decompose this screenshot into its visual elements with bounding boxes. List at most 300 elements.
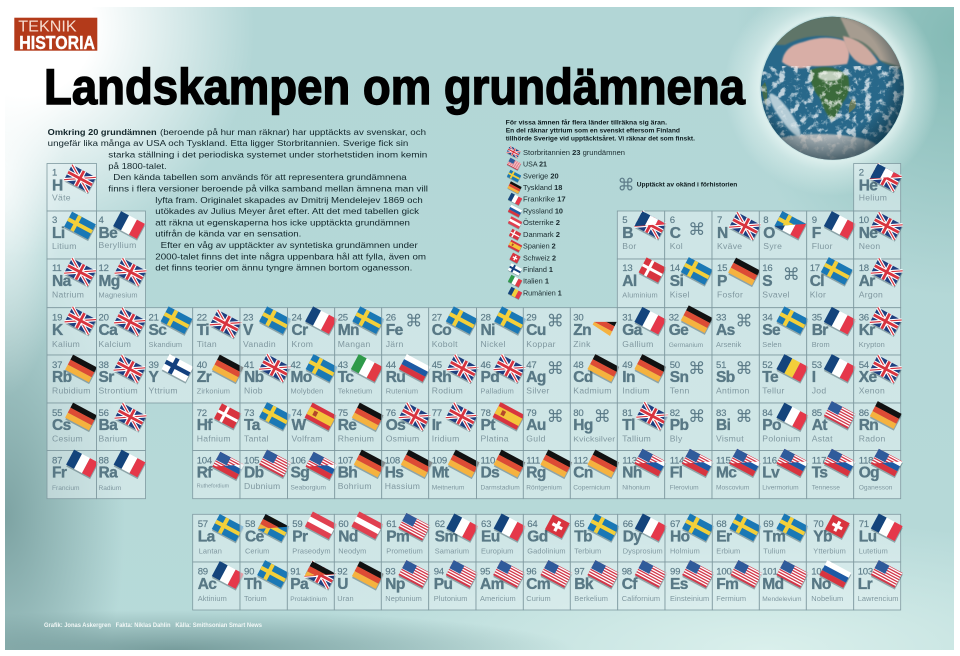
- element: Lr: [854, 560, 903, 610]
- element: Db: Dubnium: [244, 481, 280, 491]
- element: Ac: 89: [198, 566, 208, 578]
- element: Ra: Radium: [98, 485, 122, 492]
- element: Fl: Fl: [670, 464, 683, 482]
- element: Pt: 78: [480, 408, 491, 419]
- element: Cs: Cesium: [52, 434, 83, 444]
- element: Cd: Cd: [573, 369, 593, 386]
- element: Po: 84: [762, 408, 773, 419]
- element: Dy: [618, 513, 667, 562]
- element: Ar: Ar: [859, 273, 875, 290]
- element: Tm: Tm: [763, 528, 785, 545]
- text block: legend note: tillhörde Sverige vid upptäcktsåret. Vi räknar det som finskt.: [506, 134, 695, 142]
- element: Sb: [712, 355, 759, 403]
- element: Os: 76: [386, 408, 396, 419]
- element: Sm: 62: [435, 519, 445, 530]
- element: Ds: 110: [480, 456, 495, 466]
- title: Landskampen om grundämnena: [44, 59, 746, 115]
- element: Mn: Mn: [338, 322, 359, 339]
- element: Lu: Lu: [859, 528, 877, 545]
- element: Bi: ⌘: [736, 407, 752, 427]
- text block: intro: utökades av Julius Meyer året efter. Att det med tabellen gick: [155, 206, 420, 216]
- element: Hg: 80: [573, 408, 583, 419]
- element: In: 49: [622, 360, 632, 371]
- element: K: K: [52, 322, 64, 339]
- element: Am: Am: [480, 576, 504, 593]
- element: Cn: [570, 450, 620, 499]
- element: Bi: 83: [716, 408, 726, 419]
- element: Bk: Bk: [574, 576, 594, 593]
- element: Np: Np: [385, 576, 405, 593]
- logo: Teknikhistoria: HISTORIA: [19, 33, 95, 53]
- element: Cm: 96: [526, 566, 536, 578]
- element: Lv: [759, 449, 809, 499]
- element: Ni: 28: [480, 313, 491, 324]
- element: Og: 118: [859, 456, 873, 466]
- element: Yb: Ytterbium: [813, 546, 846, 555]
- element: Hs: Hs: [385, 464, 403, 482]
- element: Bk: 97: [574, 566, 584, 578]
- element: N: N: [717, 225, 728, 242]
- logo: Teknikhistoria: TEKNIK: [18, 19, 77, 36]
- element: Bh: 107: [338, 456, 353, 466]
- element: W: W: [292, 417, 306, 434]
- element: Ho: 67: [670, 519, 680, 530]
- element: B: Bor: [622, 241, 637, 251]
- element: Mg: Magnesium: [98, 290, 138, 300]
- element: Rf: Rf: [197, 464, 213, 482]
- element: La: 57: [198, 519, 208, 530]
- element: At: Astat: [812, 434, 833, 444]
- element: Og: Og: [859, 464, 879, 482]
- text block: intro: lyfta fram. Originalet skapades av Dmitrij Mendelejev 1869 och: [155, 195, 423, 205]
- element: Po: Po: [762, 417, 781, 434]
- element: Md: 101: [762, 566, 778, 578]
- element: Na: [47, 258, 97, 308]
- element: Kr: [854, 307, 902, 355]
- element: Fl: 114: [670, 456, 685, 466]
- element: Zr: Zr: [197, 369, 212, 386]
- element: Zn: 30: [573, 313, 583, 324]
- element: Te: [759, 354, 809, 403]
- element: Mn: 25: [338, 313, 348, 324]
- legend: countries: USA 21: [523, 160, 547, 169]
- icon: globe: [760, 16, 905, 162]
- element: Se: 34: [762, 313, 773, 324]
- logo: Teknikhistoria: [14, 18, 97, 53]
- element: Nh: Nihonium: [622, 484, 651, 492]
- element: Rb: [47, 355, 98, 403]
- element: P: 15: [717, 263, 727, 274]
- element: Es: Einsteinium: [670, 594, 709, 603]
- element: Hf: [193, 403, 242, 450]
- element: Ar: 18: [859, 263, 869, 274]
- element: Pa: Protaktinium: [290, 596, 327, 603]
- legend: discovered by unknown: Upptäckt av okänd i förhistorien: [637, 182, 737, 188]
- credits: Grafik: Jonas Askergren Fakta: Niklas Dahlin Källa: Smithsonian Smart News: [44, 623, 263, 629]
- element: Co: 27: [432, 313, 442, 324]
- element: Os: Osmium: [386, 434, 419, 444]
- element: B: B: [622, 225, 633, 242]
- element: Eu: Europium: [481, 546, 513, 555]
- element: N: Kväve: [717, 241, 742, 251]
- element: U: 92: [337, 566, 347, 578]
- element: Ir: Iridium: [432, 434, 460, 444]
- element: U: [334, 561, 385, 610]
- element: Yb: 70: [813, 519, 823, 530]
- element: Pd: [476, 355, 526, 403]
- element: Nb: 41: [244, 360, 254, 371]
- element: Sn: 50: [670, 360, 680, 371]
- element: Hf: Hafnium: [197, 434, 231, 444]
- element: Fe: 26: [386, 313, 396, 324]
- element: Sb: Antimon: [716, 386, 750, 396]
- element: B: 5: [622, 215, 627, 226]
- element: Si: Si: [670, 273, 683, 290]
- element: Ag: [523, 355, 570, 403]
- element: Si: [665, 257, 713, 308]
- element: Rn: Radon: [859, 434, 886, 444]
- element: Rf: Ruthefordium: [197, 484, 230, 490]
- element: Ts: 117: [812, 456, 826, 466]
- element: Er: [712, 513, 762, 562]
- legend: countries: Storbritannien 23 grundämnen: [523, 148, 625, 157]
- element: Be: Be: [98, 225, 118, 242]
- element: Bk: Berkelium: [574, 594, 608, 603]
- element: O: [759, 211, 807, 259]
- element: Ti: 22: [197, 313, 207, 324]
- element: Nd: [334, 511, 384, 562]
- element: At: [807, 401, 856, 450]
- element: O: 8: [763, 215, 768, 226]
- element: Pt: Platina: [480, 434, 509, 444]
- element: As: Arsenik: [716, 340, 742, 349]
- element: Ho: Holmium: [670, 546, 700, 555]
- periodic table: [47, 164, 903, 610]
- element: Hg: ⌘: [594, 407, 611, 427]
- element: Xe: [854, 355, 902, 403]
- element: Og: Oganesson: [859, 484, 893, 492]
- element: Zr: Zirkonium: [197, 386, 230, 396]
- element: Pr: 59: [292, 519, 302, 530]
- element: W: Volfram: [292, 434, 323, 444]
- text block: intro: Omkring 20 grundämnen: [48, 127, 157, 137]
- element: Pu: 94: [434, 566, 445, 578]
- element: Ar: [854, 258, 903, 308]
- element: Pr: Pr: [292, 528, 308, 545]
- element: Mo: Molybden: [290, 386, 323, 396]
- element: Re: [335, 403, 384, 450]
- element: Gd: [523, 514, 571, 562]
- element: Ra: 88: [98, 456, 109, 466]
- element: Bk: [570, 560, 620, 610]
- element: Al: Aluminium: [622, 290, 658, 300]
- element: Ra: Ra: [98, 464, 118, 482]
- element: Cf: Californium: [622, 594, 660, 603]
- element: F: F: [812, 225, 821, 242]
- element: Ce: Cerium: [245, 546, 269, 555]
- element: Pr: Praseodym: [292, 546, 331, 555]
- element: In: [617, 354, 667, 403]
- element: At: 85: [812, 408, 822, 419]
- element: Th: Th: [244, 576, 262, 593]
- element: V: Vanadin: [243, 339, 276, 349]
- element: Fm: Fm: [716, 576, 738, 593]
- element: Mc: Mc: [716, 464, 737, 482]
- element: Ba: Barium: [98, 434, 128, 444]
- element: La: La: [198, 528, 216, 545]
- element: O: O: [763, 225, 775, 242]
- element: H: 1: [52, 168, 57, 178]
- element: Er: Erbium: [716, 546, 740, 555]
- element: S: [759, 259, 807, 308]
- element: Md: [759, 560, 809, 610]
- element: Ca: [96, 308, 147, 355]
- element: V: 23: [243, 313, 253, 324]
- legend: discovered by unknown: ⌘: [618, 176, 634, 196]
- element: Be: 4: [98, 215, 104, 226]
- element: Tb: Terbium: [574, 546, 601, 555]
- element: Nd: Nd: [338, 528, 358, 545]
- element: Rb: Rubidium: [52, 386, 91, 396]
- element: Eu: [476, 513, 526, 562]
- element: Mc: 115: [716, 456, 731, 466]
- element: Ds: [476, 450, 526, 499]
- element: Tc: [335, 354, 383, 403]
- element: Xe: 54: [859, 360, 870, 371]
- element: Tc: Teknetium: [338, 386, 372, 396]
- element: Ba: Ba: [98, 417, 118, 434]
- element: Tb: [570, 513, 620, 562]
- element: Ac: Ac: [198, 576, 217, 593]
- element: Cs: Cs: [52, 417, 71, 434]
- element: Gd: Gadolinium: [527, 546, 566, 555]
- element: Es: [665, 560, 715, 610]
- element: Rh: 45: [432, 360, 442, 371]
- element: Db: 105: [244, 456, 259, 466]
- element: Er: Er: [716, 528, 732, 545]
- element: No: 102: [811, 566, 827, 578]
- element: Np: [381, 560, 431, 610]
- element: Y: 39: [148, 360, 159, 371]
- element: Kr: 36: [859, 313, 869, 324]
- element: Nd: Neodym: [338, 546, 366, 555]
- element: Ag: Ag: [526, 369, 546, 386]
- element: S: ⌘: [783, 265, 800, 285]
- element: Lr: 103: [858, 566, 873, 578]
- element: O: Syre: [763, 241, 782, 251]
- element: Nb: Niob: [244, 386, 263, 396]
- element: Gd: Gd: [527, 528, 548, 545]
- text block: intro: Den kända tabellen som används för att representera grundämnena: [113, 172, 407, 182]
- element: Fl: Flerovium: [670, 484, 699, 492]
- element: F: Fluor: [812, 241, 833, 251]
- element: Na: 11: [52, 263, 61, 274]
- element: Cn: Cn: [573, 464, 593, 482]
- element: Rf: [193, 450, 245, 499]
- element: Mc: Moscovium: [716, 484, 750, 492]
- element: Ra: [96, 450, 146, 499]
- element: Tm: 69: [763, 519, 773, 530]
- element: Dy: Dysprosium: [623, 546, 663, 555]
- element: Tc: Tc: [338, 369, 354, 386]
- element: Am: 95: [480, 566, 490, 578]
- legend: countries: Tyskland 18: [523, 183, 562, 192]
- element: Fm: [712, 560, 763, 610]
- element: Rg: 111: [526, 456, 540, 466]
- element: Fm: 100: [716, 566, 732, 578]
- element: F: 9: [812, 215, 817, 226]
- element: Ca: Kalcium: [98, 339, 131, 349]
- element: Pr: [287, 511, 338, 562]
- element: Cr: [288, 306, 338, 355]
- element: Ts: Tennesse: [812, 484, 840, 492]
- element: Hg: Kvicksilver: [573, 434, 616, 444]
- legend: countries: Rumänien 1: [523, 288, 562, 298]
- element: Yb: [806, 514, 854, 562]
- element: Tl: 81: [622, 408, 632, 419]
- element: Br: Br: [812, 322, 828, 339]
- element: S: S: [762, 273, 772, 290]
- element: Ce: Ce: [245, 528, 265, 545]
- element: Be: [96, 211, 146, 259]
- element: Lu: Lutetium: [859, 546, 888, 555]
- element: Pd: 46: [480, 360, 491, 371]
- legend: countries: Sverige 20: [523, 171, 559, 180]
- element: Am: Americium: [480, 594, 516, 603]
- element: Pb: [665, 403, 712, 450]
- element: Pa: Pa: [290, 576, 309, 593]
- element: Mc: [712, 449, 762, 499]
- element: As: 33: [716, 313, 726, 324]
- element: Cl: [807, 257, 854, 308]
- element: Ne: Ne: [859, 225, 878, 242]
- element: Mg: 12: [98, 263, 109, 274]
- element: Ga: 31: [622, 313, 632, 324]
- element: Dy: Dy: [623, 528, 642, 545]
- element: Cu: 29: [526, 313, 536, 324]
- element: Th: 90: [244, 566, 254, 578]
- text block: intro: (beroende på hur man räknar) har upptäckts av svenskar, och: [160, 127, 426, 137]
- element: Ca: Ca: [98, 322, 118, 339]
- element: Xe: Xenon: [859, 386, 885, 396]
- element: Cu: ⌘: [547, 312, 564, 332]
- element: Pt: [476, 402, 525, 450]
- element: W: 74: [292, 408, 303, 419]
- element: Au: Au: [526, 417, 546, 434]
- element: Fr: Fr: [52, 464, 67, 482]
- element: Nh: [617, 449, 667, 499]
- element: Pm: Prometium: [386, 546, 423, 555]
- element: Au: ⌘: [547, 407, 564, 427]
- element: Sb: ⌘: [736, 359, 752, 379]
- element: Sr: [96, 355, 146, 403]
- element: Ts: Ts: [812, 464, 827, 482]
- element: Se: Se: [762, 322, 781, 339]
- element: Rf: 104: [197, 456, 213, 466]
- element: Tl: Tl: [622, 417, 635, 434]
- element: Mg: [96, 258, 147, 308]
- element: Tc: 43: [338, 360, 348, 371]
- element: Cm: Cm: [526, 576, 550, 593]
- element: Ds: Ds: [480, 464, 499, 482]
- element: Ta: [240, 402, 292, 450]
- element: Lv: Lv: [762, 464, 780, 482]
- text block: intro: på 1800-talet.: [108, 161, 167, 171]
- element: C: Kol: [670, 241, 683, 251]
- legend: discovered by unknown: [618, 176, 737, 196]
- element: Cd: Kadmium: [573, 386, 612, 396]
- element: K: [47, 307, 97, 355]
- element: H: Väte: [52, 192, 71, 202]
- element: Os: [382, 403, 431, 450]
- text block: intro: ungefär lika många av USA och Tyskland. Etta ligger Storbritannien. Sverige fick sin: [48, 138, 408, 148]
- element: Rn: Rn: [859, 417, 878, 434]
- element: Cr: Cr: [292, 322, 308, 339]
- element: As: ⌘: [736, 312, 752, 332]
- element: Dy: 66: [623, 519, 633, 530]
- element: Md: Md: [762, 576, 784, 593]
- text block: intro: att räkna ut egenskaperna hos icke upptäckta grundämnen: [155, 217, 410, 227]
- element: Ga: Ga: [622, 322, 643, 339]
- element: H: [47, 164, 97, 211]
- element: Pb: 82: [670, 408, 680, 419]
- element: Os: Os: [386, 417, 405, 434]
- element: Cs: [47, 403, 98, 450]
- element: Pu: Pu: [434, 576, 452, 593]
- element: Ta: Ta: [244, 417, 261, 434]
- element: Db: [240, 450, 292, 499]
- element: Zn: [570, 308, 623, 355]
- element: Hs: Hassium: [385, 481, 420, 491]
- element: Ce: [240, 514, 290, 562]
- element: Sb: Sb: [716, 369, 735, 386]
- element: Ni: [476, 306, 527, 355]
- element: Mt: Meitnerium: [432, 484, 465, 492]
- element: Tl: Tallium: [622, 434, 651, 444]
- element: Re: 75: [338, 408, 348, 419]
- element: Cu: Koppar: [526, 339, 556, 349]
- element: Pm: [381, 513, 431, 562]
- element: H: H: [52, 178, 63, 194]
- element: Cd: [570, 354, 620, 403]
- element: Te: 52: [762, 360, 772, 371]
- element: Si: 14: [670, 263, 681, 274]
- text block: intro: starka ställning i det periodiska systemet under storhetstiden inom kemin: [108, 150, 427, 160]
- element: Cu: [523, 308, 570, 355]
- element: Cl: 17: [810, 263, 820, 274]
- element: Rb: 37: [52, 360, 62, 371]
- element: Co: [429, 306, 478, 355]
- element: Es: Es: [670, 576, 688, 593]
- element: Tm: [759, 513, 809, 562]
- element: Sm: [429, 513, 479, 562]
- element: Se: Selen: [762, 340, 782, 349]
- element: Rh: Rh: [432, 369, 451, 386]
- element: Cu: Cu: [526, 322, 546, 339]
- element: Nd: 60: [338, 519, 348, 530]
- element: Lr: Lawrencium: [858, 594, 899, 603]
- element: Ru: Ru: [386, 369, 405, 386]
- element: Br: 35: [812, 313, 822, 324]
- element: Br: [807, 307, 856, 355]
- element: Ge: Germanium: [669, 342, 704, 349]
- element: Zn: Zink: [573, 339, 591, 349]
- element: Ru: Rutenium: [386, 386, 418, 396]
- element: Pm: 61: [386, 519, 396, 530]
- element: V: V: [243, 322, 254, 339]
- element: Sn: [665, 355, 712, 403]
- element: Fm: Fermium: [716, 594, 746, 603]
